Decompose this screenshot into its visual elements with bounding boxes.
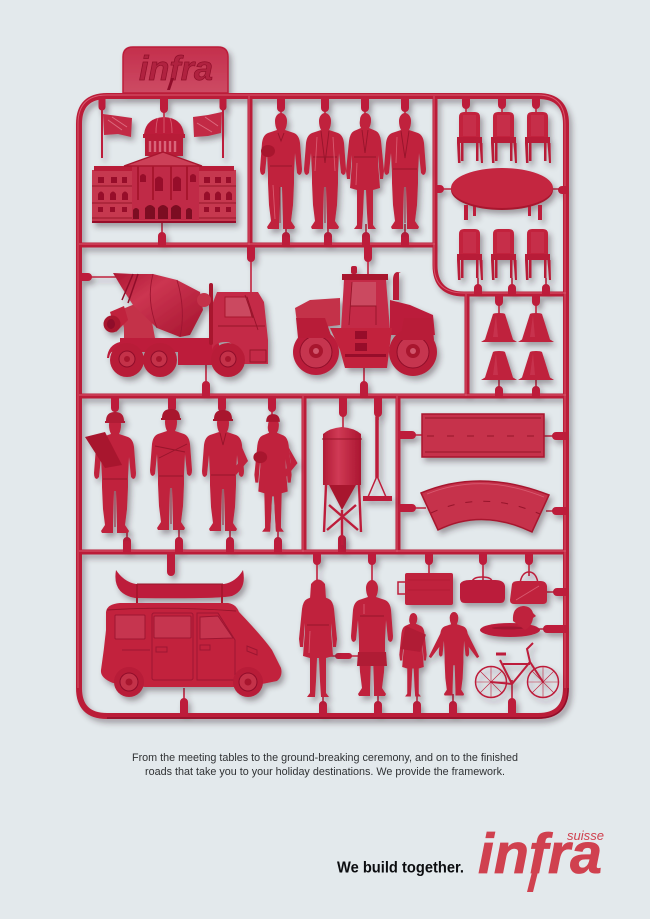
icon: bicycle	[476, 643, 558, 698]
icon: canoe	[115, 570, 244, 603]
icon: duffel bag	[460, 577, 505, 603]
panel: road pieces	[421, 414, 549, 532]
panel: construction workers	[85, 409, 298, 533]
name tab	[123, 47, 228, 93]
figure: man in suit	[384, 113, 426, 229]
sprue lines	[78, 95, 568, 718]
panel: business people	[260, 113, 426, 229]
icon: left flag	[101, 105, 132, 158]
icon: handbag	[510, 572, 547, 604]
kit frame	[78, 47, 568, 718]
panel: concrete mixer truck	[104, 273, 268, 377]
figure: worker with crossed arms	[150, 409, 192, 530]
slogan: We build together.	[337, 860, 464, 876]
icon: roller drums	[293, 318, 437, 376]
icon: curved road	[421, 481, 549, 532]
logo: infra suisse: suisse	[567, 828, 604, 843]
figure: man with helmet under arm	[260, 113, 302, 229]
figure: man in shorts	[351, 580, 393, 696]
icon: round table	[451, 168, 553, 220]
icon: straight road	[422, 414, 544, 457]
icon: truck cab	[197, 283, 268, 364]
icon: van wheels	[114, 667, 263, 697]
icon: mixer stand	[120, 304, 155, 338]
panel: holiday family	[299, 580, 479, 697]
icon: building	[92, 117, 236, 223]
icon: van body	[101, 603, 282, 687]
icon: truck wheels	[110, 343, 245, 377]
figure: female worker with helmet	[253, 414, 298, 532]
sprue gates and connectors	[79, 96, 566, 716]
icon: chairs bottom row	[457, 229, 551, 280]
figure: man in jacket	[304, 113, 346, 229]
icon: roller front hood	[390, 300, 435, 335]
icon: duck swim ring	[480, 606, 540, 637]
icon: exhaust stack	[393, 272, 401, 300]
figure: girl	[399, 613, 427, 697]
caption: From the meeting tables to the ground-breaking ceremony, and on to the finished	[132, 752, 518, 764]
figure: worker reading plan	[85, 412, 136, 533]
figure: boy	[429, 612, 479, 696]
caption	[132, 752, 518, 778]
panel: traffic cones	[481, 313, 554, 380]
panel: road roller	[293, 266, 437, 376]
logo: infra suisse: infra	[478, 822, 602, 886]
icon: roller centre body	[330, 328, 392, 368]
icon: chairs top row	[457, 112, 551, 163]
figure: woman in skirt suit	[346, 113, 384, 229]
tab lettering: infra	[139, 50, 213, 88]
icon: cones	[481, 313, 554, 380]
icon: chassis	[107, 338, 222, 365]
figure: worker with hand on hip	[202, 410, 248, 531]
caption: roads that take you to your holiday destinations. We provide the framework.	[145, 766, 505, 778]
icon: suitcase	[398, 573, 453, 605]
icon: roller cab	[341, 266, 390, 330]
icon: mixer drum	[113, 273, 203, 337]
icon: right flag	[193, 105, 224, 158]
panel: luggage and toys	[398, 572, 558, 698]
panel: parliament building and flags	[92, 105, 236, 223]
figure: woman	[299, 580, 337, 697]
panel: van with canoe	[101, 570, 282, 697]
panel: silo and rake	[322, 417, 392, 545]
panel: meeting table and chairs	[451, 112, 553, 280]
icon: roller rear hood	[295, 298, 340, 330]
icon: rake	[363, 417, 392, 501]
icon: discharge chute	[104, 306, 128, 332]
icon: silo	[322, 427, 362, 545]
